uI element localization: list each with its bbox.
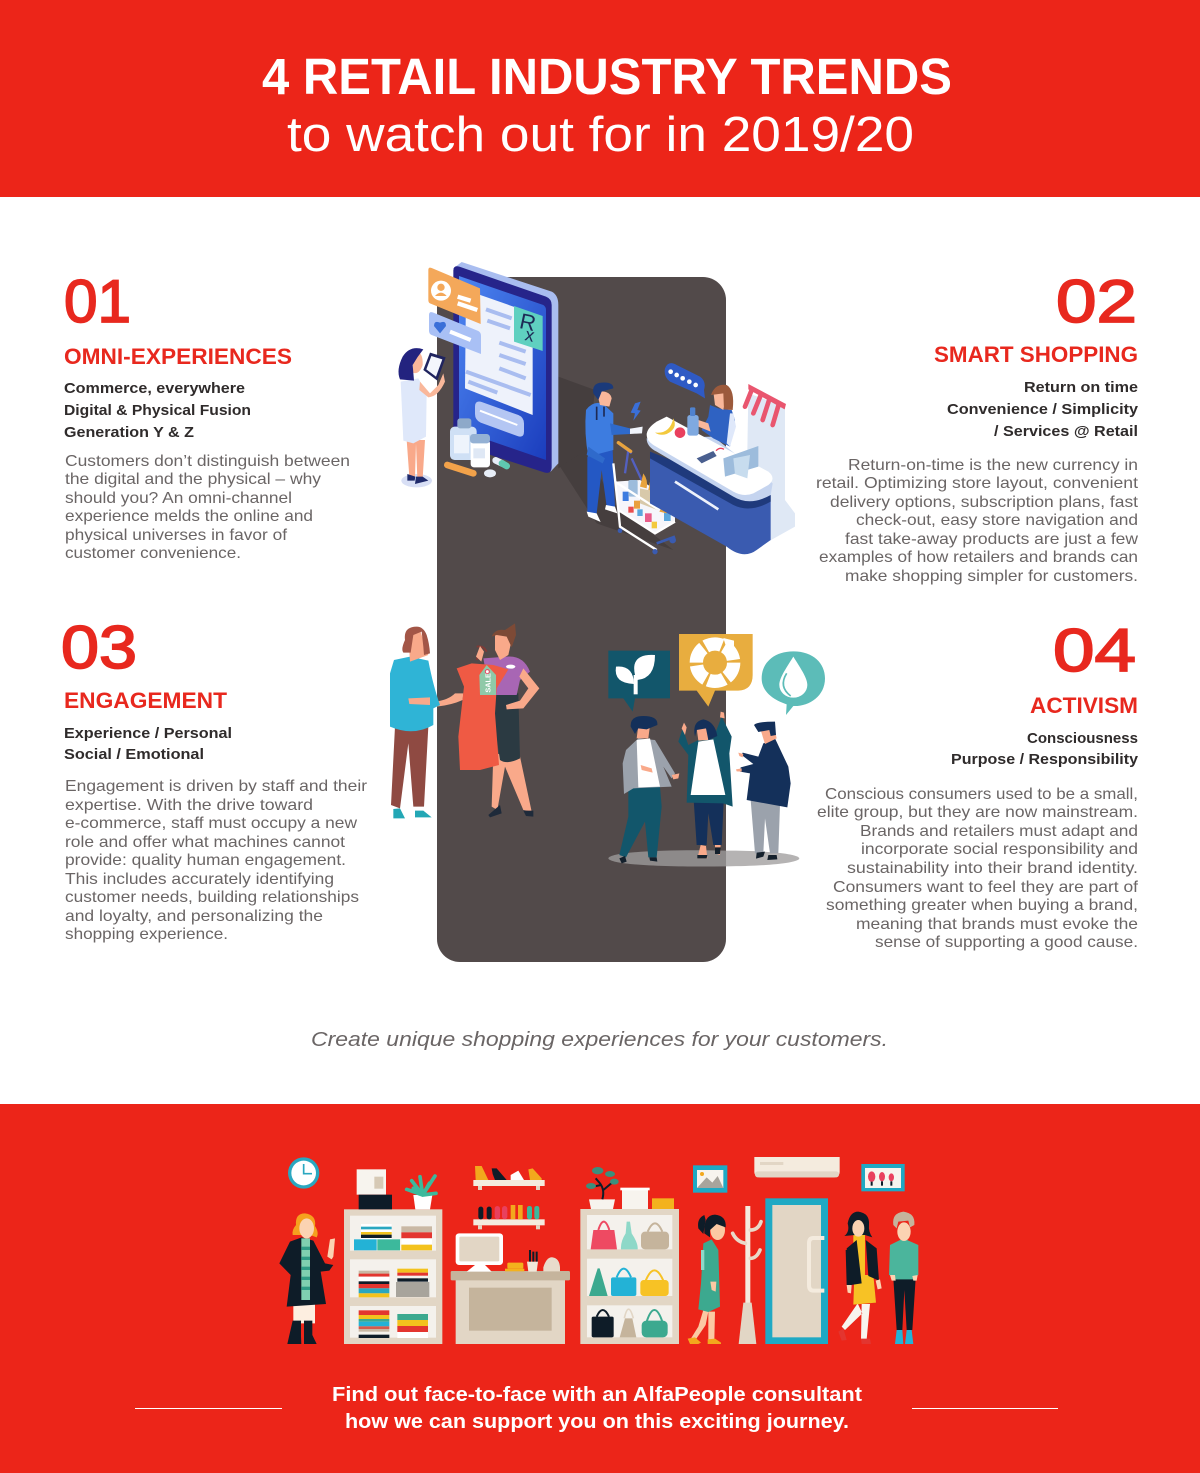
footer divider left	[135, 1408, 282, 1409]
body text 02: Return-on-time is the new currency in	[848, 457, 1138, 474]
keywords 04	[951, 730, 1139, 768]
keywords 01	[64, 380, 251, 441]
ground shadow	[608, 850, 726, 867]
heading 03: ENGAGEMENT	[64, 688, 228, 713]
body text 04: sense of supporting a good cause.	[875, 934, 1138, 951]
body text 03: Engagement is driven by staff and their	[65, 778, 368, 795]
heading 04: ACTIVISM	[1030, 693, 1138, 718]
keywords 02: Return on time	[1024, 379, 1138, 396]
body text 01: experience melds the online and	[65, 508, 313, 525]
section 03: engagement	[61, 614, 368, 943]
customer with cart	[560, 383, 673, 550]
keywords 02: / Services @ Retail	[994, 423, 1138, 440]
keywords 01: Commerce, everywhere	[64, 380, 245, 397]
number 03: 03	[61, 614, 137, 681]
rx label x: x	[523, 324, 536, 346]
air conditioner	[754, 1157, 840, 1177]
body text 03: and loyalty, and personalizing the	[65, 908, 323, 925]
keywords 03	[64, 725, 232, 763]
illustration: pharmacy tablet and nurse	[398, 262, 795, 554]
body text 02: delivery options, subscription plans, fast	[830, 494, 1139, 511]
body text 01: physical universes in favor of	[65, 527, 288, 544]
tagline: Create unique shopping experiences for your customers.	[311, 1028, 888, 1051]
section 04: activism	[817, 617, 1139, 951]
footer call to action	[332, 1383, 862, 1433]
bag shelf	[580, 1209, 679, 1344]
number 01: 01	[64, 268, 131, 335]
keywords 01: Digital & Physical Fusion	[64, 402, 251, 419]
speech bubble: water drop	[762, 651, 825, 715]
keywords 01: Generation Y & Z	[64, 424, 194, 441]
body text 04	[817, 786, 1139, 951]
door	[765, 1198, 828, 1344]
footer call to action: Find out face-to-face with an AlfaPeople consultant	[332, 1383, 862, 1406]
coat stand	[733, 1206, 761, 1344]
body text 01: customer convenience.	[65, 545, 241, 562]
subtitle: to watch out for in 2019/20	[287, 108, 914, 162]
shopper with grey hair	[889, 1212, 918, 1344]
sale tag text: SALE	[484, 673, 493, 693]
body text 01	[65, 453, 350, 562]
body text 03: expertise. With the drive toward	[65, 797, 313, 814]
activist 2	[678, 712, 733, 858]
activist 3	[736, 722, 791, 860]
footer call to action: how we can support you on this exciting journey.	[345, 1410, 849, 1433]
wall picture: landscape	[693, 1165, 727, 1193]
body text 04: elite group, but they are now mainstream.	[817, 804, 1138, 821]
body text 01: Customers don’t distinguish between	[65, 453, 350, 470]
section 01: omni-experiences	[64, 268, 350, 562]
body text 03: customer needs, building relationships	[65, 889, 359, 906]
cash desk	[451, 1233, 570, 1344]
shopping cart	[613, 443, 676, 554]
body text 02: retail. Optimizing store layout, convenient	[816, 475, 1139, 492]
section 02: smart shopping	[816, 268, 1139, 585]
body text 01: the digital and the physical – why	[65, 471, 321, 488]
keywords 02	[947, 379, 1139, 440]
body text 04: meaning that brands must evoke the	[856, 916, 1138, 933]
body text 02: check-out, easy store navigation and	[856, 512, 1138, 529]
body text 04: something greater when buying a brand,	[826, 897, 1138, 914]
keywords 02: Convenience / Simplicity	[947, 401, 1139, 418]
body text 02: make shopping simpler for customers.	[845, 568, 1138, 585]
checkout counter	[647, 363, 795, 554]
keywords 04: Consciousness	[1027, 730, 1138, 747]
wall picture: lamps	[861, 1164, 905, 1191]
shopper in yellow skirt	[838, 1212, 882, 1344]
body text 04: Conscious consumers used to be a small,	[825, 786, 1138, 803]
shopper in green dress	[688, 1215, 726, 1344]
illustration: staff and customer with red dress	[390, 623, 825, 867]
body text 01: should you? An omni-channel	[65, 490, 292, 507]
wall clock	[288, 1157, 319, 1189]
central dark panel	[437, 277, 726, 962]
keywords 04: Purpose / Responsibility	[951, 751, 1139, 768]
heading 02: SMART SHOPPING	[934, 342, 1138, 367]
footer divider right	[912, 1408, 1058, 1409]
customer in blue top	[390, 627, 463, 818]
customer in dark coat	[279, 1213, 335, 1344]
illustration: shop interior right	[580, 1157, 918, 1344]
body text 02: fast take-away products are just a few	[845, 531, 1138, 548]
body text 02	[816, 457, 1139, 585]
red dress with sale tag	[457, 646, 508, 770]
keywords 03: Social / Emotional	[64, 746, 204, 763]
shop assistant	[483, 623, 539, 817]
body text 04: Consumers want to feel they are part of	[833, 879, 1139, 896]
body text 04: sustainability into their brand identity.	[847, 860, 1138, 877]
footer band	[0, 1104, 1200, 1473]
body text 02: examples of how retailers and brands can	[819, 549, 1138, 566]
shoe shelves	[473, 1166, 545, 1229]
body text 03: This includes accurately identifying	[65, 871, 334, 888]
rx label: R	[517, 308, 538, 336]
nurse	[398, 348, 446, 487]
body text 03	[65, 778, 368, 943]
header band	[0, 0, 1200, 197]
number 04: 04	[1053, 617, 1136, 684]
activist 1	[619, 716, 679, 863]
potted plant	[407, 1176, 436, 1209]
number 02: 02	[1056, 268, 1137, 335]
body text 03: shopping experience.	[65, 926, 228, 943]
keywords 03: Experience / Personal	[64, 725, 232, 742]
clothing shelf	[344, 1169, 442, 1344]
illustration: shop interior left	[279, 1157, 570, 1344]
bonsai and boxes	[586, 1167, 674, 1209]
body text 03: role and offer what machines cannot	[65, 834, 346, 851]
heading 01: OMNI-EXPERIENCES	[64, 344, 292, 369]
body text 03: provide: quality human engagement.	[65, 852, 346, 869]
rx label	[515, 308, 539, 346]
body text 04: Brands and retailers must adapt and	[860, 823, 1138, 840]
speech bubble: recycling	[679, 634, 753, 707]
body text 03: e-commerce, staff must occupy a new	[65, 815, 357, 832]
speech bubble: leaf	[608, 651, 670, 712]
body text 04: incorporate social responsibility and	[861, 841, 1138, 858]
title: 4 RETAIL INDUSTRY TRENDS	[262, 48, 952, 105]
